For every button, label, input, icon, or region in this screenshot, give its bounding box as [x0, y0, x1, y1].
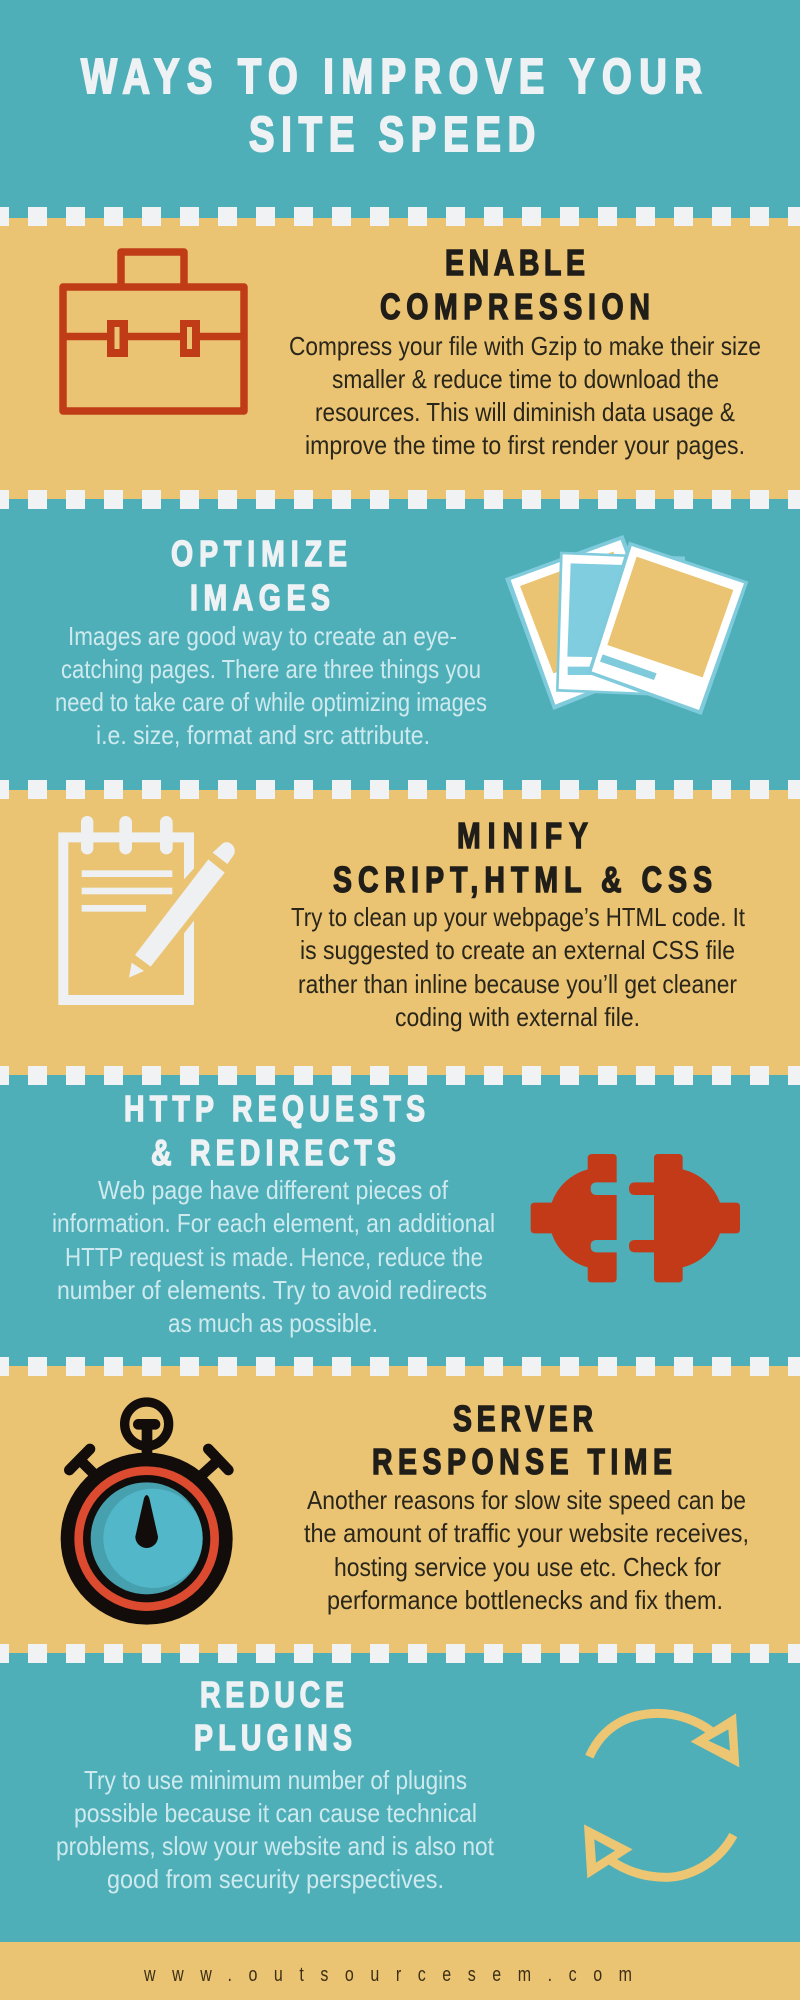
heading: enable compression: COMPRESSION — [380, 286, 650, 327]
heading: server response time: RESPONSE TIME — [372, 1441, 672, 1482]
heading: enable compression — [380, 242, 650, 327]
text: http requests: information. For each element, an additional — [52, 1208, 495, 1238]
icon: briefcase — [63, 252, 244, 411]
icon: plug — [531, 1154, 740, 1282]
text: reduce plugins: possible because it can cause technical — [74, 1798, 477, 1828]
text: reduce plugins: Try to use minimum number of plugins — [84, 1765, 467, 1795]
text: optimize images: catching pages. There are three things you — [61, 654, 481, 684]
text: enable compression: smaller & reduce time to download the — [332, 364, 719, 394]
title — [81, 50, 702, 162]
text: minify: coding with external file. — [395, 1002, 640, 1032]
heading: reduce plugins: PLUGINS — [194, 1717, 352, 1758]
text: http requests: as much as possible. — [168, 1308, 378, 1338]
text: enable compression — [289, 331, 761, 460]
text: minify: is suggested to create an external CSS file — [300, 935, 735, 965]
text: server response time: the amount of traffic your website receives, — [304, 1518, 749, 1548]
heading: minify: MINIFY — [457, 815, 588, 856]
text: reduce plugins — [56, 1765, 495, 1894]
heading: reduce plugins — [194, 1674, 352, 1758]
heading: minify — [333, 815, 712, 900]
text: reduce plugins: good from security perspectives. — [107, 1864, 444, 1894]
text: http requests: number of elements. Try to avoid redirects — [57, 1275, 487, 1305]
title: SITE SPEED — [249, 108, 535, 162]
text: enable compression: improve the time to first render your pages. — [305, 430, 745, 460]
icon: notepad and pencil — [58, 816, 235, 1005]
heading: reduce plugins: REDUCE — [200, 1674, 344, 1715]
text: server response time — [304, 1485, 749, 1615]
title: WAYS TO IMPROVE YOUR — [81, 50, 702, 104]
text: optimize images: need to take care of while optimizing images — [55, 687, 487, 717]
heading: http requests — [124, 1088, 425, 1173]
icon: cycle arrows — [584, 1713, 739, 1878]
footer: www.outsourcesem.com — [143, 1963, 632, 1985]
heading: http requests: HTTP REQUESTS — [124, 1088, 425, 1129]
heading: http requests: & REDIRECTS — [151, 1132, 396, 1173]
heading: minify: SCRIPT,HTML & CSS — [333, 859, 712, 900]
panel: minify — [0, 790, 800, 1075]
text: server response time: Another reasons for slow site speed can be — [307, 1485, 746, 1515]
panel: reduce plugins — [0, 1653, 800, 1942]
text: http requests — [52, 1175, 495, 1338]
text: reduce plugins: problems, slow your website and is also not — [56, 1831, 495, 1861]
text: server response time: hosting service you use etc. Check for — [334, 1552, 721, 1582]
panel: server response time — [0, 1366, 800, 1653]
panel: optimize images — [0, 499, 800, 790]
text: minify: rather than inline because you’ll get cleaner — [298, 969, 737, 999]
text: http requests: Web page have different pieces of — [98, 1175, 449, 1205]
panel: http requests — [0, 1075, 800, 1366]
text: http requests: HTTP request is made. Hence, reduce the — [65, 1242, 483, 1272]
text: optimize images: Images are good way to create an eye- — [68, 621, 457, 651]
text: enable compression: resources. This will diminish data usage & — [315, 397, 735, 427]
footer — [0, 1942, 800, 2000]
panel: enable compression — [0, 218, 800, 499]
icon: stopwatch — [61, 1402, 233, 1625]
text: server response time: performance bottlenecks and fix them. — [327, 1585, 723, 1615]
text: optimize images: i.e. size, format and src attribute. — [96, 720, 430, 750]
icon: photos — [505, 535, 748, 715]
heading: optimize images: OPTIMIZE — [171, 533, 347, 574]
heading: enable compression: ENABLE — [445, 242, 585, 283]
heading: optimize images: IMAGES — [190, 577, 330, 618]
text: optimize images — [55, 621, 487, 750]
heading: optimize images — [171, 533, 347, 618]
text: minify — [291, 902, 746, 1032]
heading: server response time: SERVER — [453, 1398, 593, 1439]
heading: server response time — [372, 1398, 672, 1482]
